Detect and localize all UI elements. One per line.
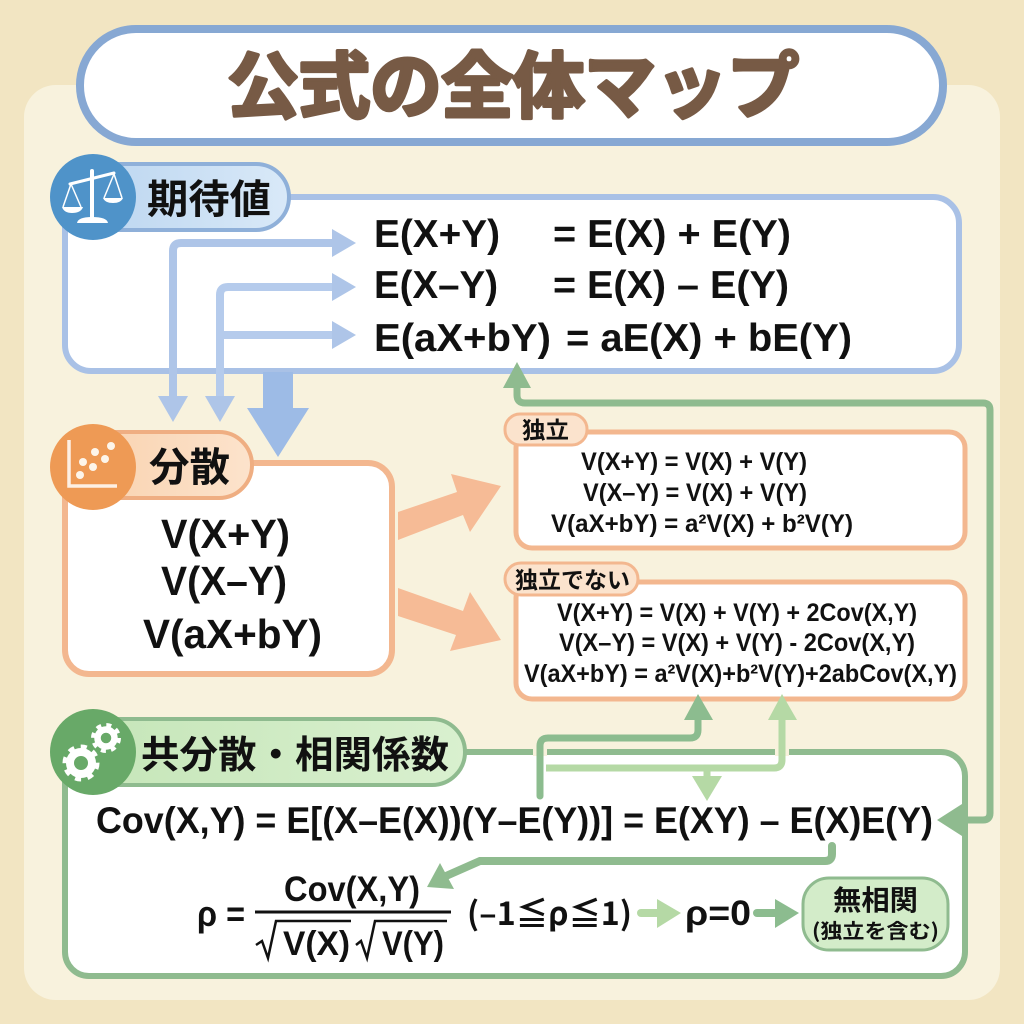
formula: correlation coefficient: V(X) <box>283 925 350 963</box>
arrow: variance to independent <box>398 474 501 540</box>
tag text: independent: 独立 <box>522 411 569 445</box>
arrows: variance to cases <box>398 474 501 651</box>
callout: no correlation: (独立を含む) <box>812 915 939 944</box>
formula: correlation coefficient <box>197 870 632 963</box>
heading pill: covariance <box>93 719 465 785</box>
heading: covariance and correlation: 共分散・相関係数 <box>141 724 449 779</box>
panel: not independent <box>505 561 965 699</box>
arrow: variance to dependent <box>398 588 501 651</box>
arrow: expected value to variance <box>247 372 309 457</box>
formulas: expected value: E(X+Y) <box>374 213 500 256</box>
title text: 公式の全体マップ <box>227 28 799 133</box>
panel: expected value <box>50 154 959 371</box>
formulas: independent: V(X+Y) = V(X) + V(Y) <box>581 448 807 476</box>
heading pill: expected value <box>93 164 289 230</box>
formulas: expected value: = E(X) + E(Y) <box>553 213 791 256</box>
formula: correlation coefficient: ρ = <box>197 893 245 934</box>
arrow: covariance to correlation <box>427 846 832 889</box>
heading: variance: 分散 <box>149 435 230 493</box>
arrow: covariance to dependent term 1 <box>533 694 713 796</box>
arrow: range to rho zero <box>641 899 681 928</box>
heading pill: variance <box>93 432 252 498</box>
icon: scatter chart <box>50 424 136 510</box>
formulas: variance: V(aX+bY) <box>143 611 322 657</box>
callout: no correlation: 無相関 <box>833 879 918 919</box>
heading: expected value: 期待値 <box>147 167 271 225</box>
formulas: expected value: E(X–Y) <box>374 264 498 307</box>
formula: correlation coefficient: (–1≦ρ≦1) <box>467 889 632 935</box>
formulas: expected value: E(aX+bY) <box>374 317 551 360</box>
panel: independent <box>505 411 965 548</box>
panel: variance <box>50 424 392 674</box>
callout: no correlation <box>803 878 948 950</box>
formulas: variance: V(X+Y) <box>161 511 290 557</box>
formulas: variance: V(X–Y) <box>161 558 287 604</box>
tag text: not independent: 独立でない <box>515 561 630 595</box>
formulas: independent: V(X–Y) = V(X) + V(Y) <box>583 479 807 507</box>
formulas: expected value: = E(X) – E(Y) <box>553 264 789 307</box>
formulas: expected value <box>374 213 852 360</box>
formula: covariance: Cov(X,Y) = E[(X–E(X))(Y–E(Y))] = E(XY) – E(X)E(Y) <box>96 800 933 841</box>
value: rho equals zero: ρ=0 <box>685 894 751 933</box>
icon: gears <box>50 709 136 795</box>
arrow: rho zero to no correlation <box>757 899 799 928</box>
formulas: not independent: V(aX+bY) = a²V(X)+b²V(Y)+2abCov(X,Y) <box>524 660 957 688</box>
formula: correlation coefficient: Cov(X,Y) <box>284 870 420 909</box>
panel: covariance and correlation <box>50 709 965 976</box>
arrows: expected value to formulas <box>158 229 356 422</box>
formulas: not independent <box>524 599 957 688</box>
formulas: independent <box>551 448 853 538</box>
formulas: independent: V(aX+bY) = a²V(X) + b²V(Y) <box>551 510 853 538</box>
title banner <box>80 28 943 142</box>
formulas: not independent: V(X+Y) = V(X) + V(Y) + 2Cov(X,Y) <box>557 599 917 627</box>
arrow: covariance to dependent term 2 <box>546 694 797 801</box>
formulas: variance <box>143 511 322 657</box>
formulas: expected value: = aE(X) + bE(Y) <box>566 317 852 360</box>
arrow: covariance to expected value <box>503 362 990 836</box>
icon: balance scale <box>50 154 136 240</box>
tag: independent <box>505 414 587 445</box>
tag: not independent <box>505 563 638 595</box>
formula: correlation coefficient: V(Y) <box>382 925 444 963</box>
formulas: not independent: V(X–Y) = V(X) + V(Y) - 2Cov(X,Y) <box>559 629 915 657</box>
